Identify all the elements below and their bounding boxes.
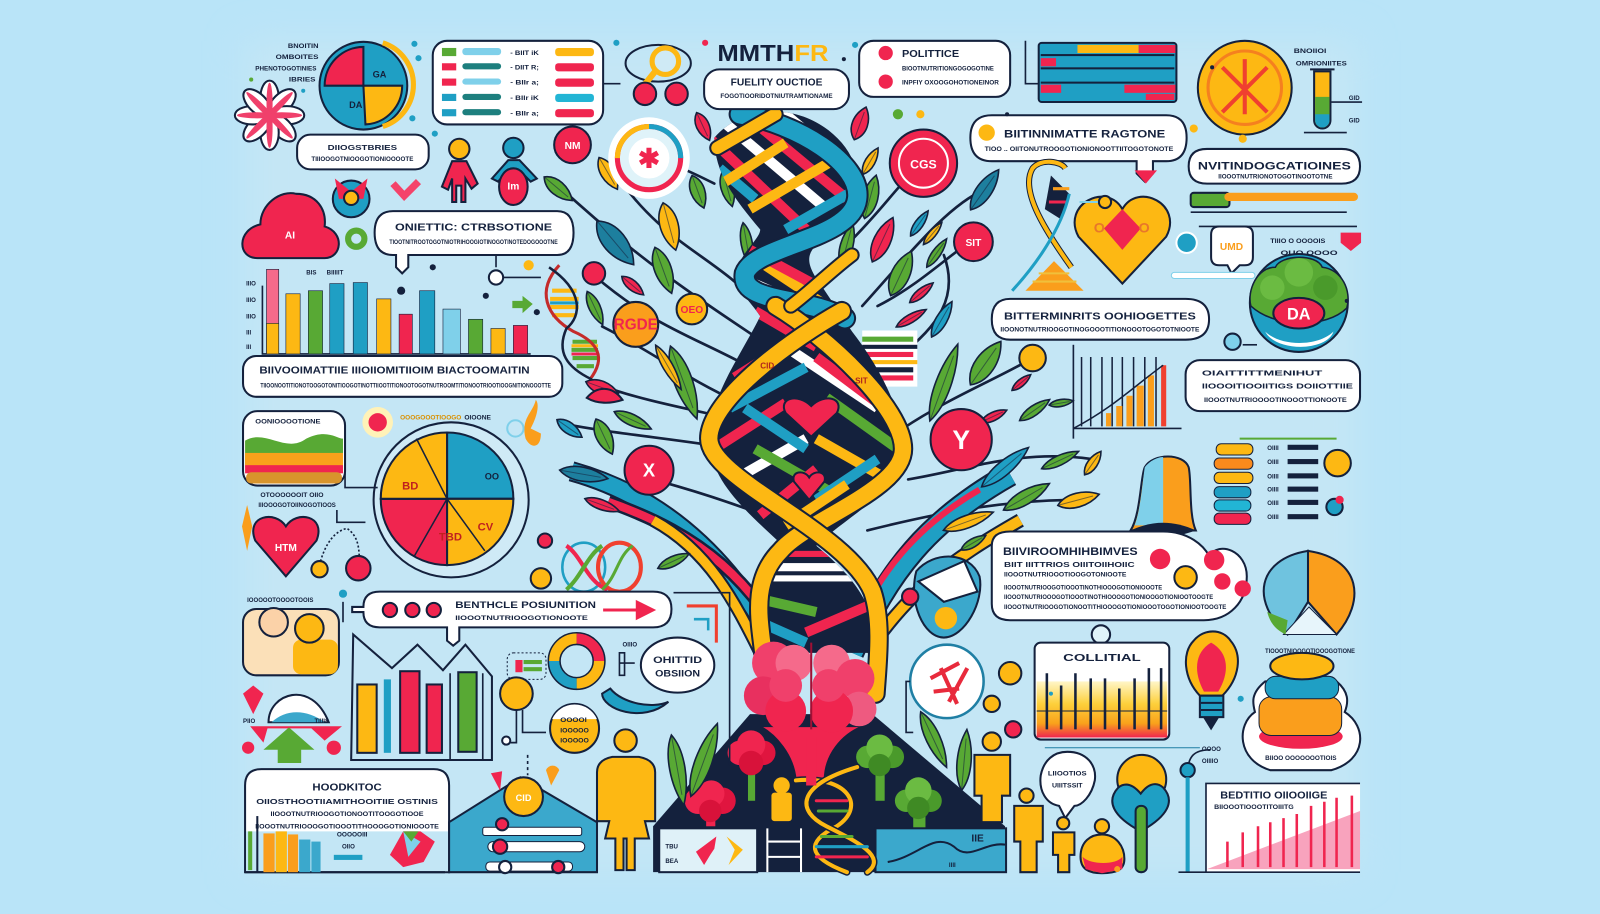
box: environment text: IIOOOTNUTRIOOOGOTIOOOTINOTHIOOOGOTIONIOOGOTIONIOOTOOGTE [1004, 594, 1213, 601]
box: nvitindog: NVITINDOGCATIOINES [1198, 160, 1351, 172]
ladder [767, 828, 801, 872]
box: environment text: BIIT IIITTRIOS OIIITOIIHOIIC [1004, 561, 1135, 569]
heart yellow [1075, 197, 1170, 284]
lollipop line [1180, 746, 1221, 872]
dark bars list: OIIII [1267, 459, 1279, 466]
small text top left: BNOITIN [288, 43, 319, 50]
circle labels: SIT [965, 238, 982, 249]
chart labels: IIIO [246, 297, 256, 304]
right-top box: biittinnimatte: BIITINNIMATTE RAGTONE [1004, 129, 1166, 141]
helix dark core [709, 112, 904, 653]
salad bowl [1250, 254, 1348, 352]
bubble chat: UIIITSSIT [1052, 783, 1083, 790]
frame lines [906, 681, 913, 732]
red bud left [587, 389, 623, 403]
box: oiaittit: OIAITTITTMENIHUT [1202, 368, 1323, 377]
helix hearts [784, 398, 839, 500]
small dna [796, 767, 874, 872]
strand labels [760, 361, 868, 386]
baseline [1045, 747, 1200, 749]
text label: OUO OOOO [1280, 250, 1338, 257]
bubble obsiion: OBSIION [655, 668, 700, 678]
stripes by helix [862, 331, 917, 387]
dark bars list: OIIII [1267, 487, 1279, 494]
small text: IIIOOOGOTOIINOGOTIOOS [258, 502, 336, 509]
blue figure [492, 138, 537, 205]
dots near ribbon [1080, 124, 1198, 208]
yellow person large [597, 729, 655, 870]
people card [243, 608, 339, 675]
text label: TIIIO O OOOOIS [1270, 238, 1325, 245]
left icons: PIIO [243, 718, 256, 725]
subtitle box: FUELITY OUCTIOE [731, 78, 823, 89]
pie top left [320, 42, 413, 130]
small text [258, 492, 336, 509]
box: diiogstbries [297, 135, 429, 169]
pie labels: CV [478, 521, 494, 533]
helix rungs [709, 106, 898, 643]
row 1 [442, 48, 594, 57]
coin bubble: IOOOOO [560, 738, 589, 745]
box: benthcle: IIOOOTNUTRIOOGOTIONOOTE [455, 615, 588, 622]
blue house [449, 766, 597, 873]
chart labels: BIIIIIT [327, 269, 344, 276]
small label: IOOOOOTOOOOTOOIS [247, 597, 313, 604]
small icon: blue bird [333, 179, 370, 217]
small text top left: PHENOTOGOTINIES [255, 65, 316, 72]
red circle nm [554, 126, 591, 163]
dark bars list [1267, 445, 1318, 521]
box: environment text [992, 531, 1251, 620]
coin bubble [550, 704, 599, 753]
box: nutrition [243, 356, 562, 397]
stripes connector [1025, 41, 1039, 84]
row 2 [442, 63, 594, 71]
trees [685, 730, 942, 829]
test tube [1294, 48, 1362, 133]
right leaves [835, 104, 1105, 553]
green leaves lower right [914, 709, 974, 791]
dashed line [339, 590, 347, 622]
heart red: HTM [275, 543, 297, 554]
red glyph circle [910, 645, 984, 718]
pie labels [402, 471, 499, 544]
box: nutrition: BIIVOOIMATTIIE IIIOIIOMITIIOIM BIACTOOMAITIN [259, 365, 530, 376]
box: nvitindog: IIOOOTNUTRIONOTOGOTINOOTOTNE [1218, 174, 1332, 181]
colour stacks [1214, 444, 1253, 524]
yellow strands [709, 114, 903, 694]
box: genetic: TIOOTNITROOTOGOTNIOTRIHOOGIOTINOGOTINOTEDOGOOOTNE [389, 239, 558, 246]
house bar chart [351, 634, 492, 760]
coin bubble: IOOOOO [560, 727, 589, 734]
test tube: BNOIIOI [1294, 48, 1327, 55]
box: politice: POLITTICE [902, 49, 959, 60]
blue figure: Im [507, 182, 519, 193]
chart bottom right [1178, 783, 1360, 872]
row 4 [442, 94, 594, 102]
box: politice: INPFIY OXOOGOHOTIONEINOR [902, 80, 1000, 87]
dark bars list: OIIII [1267, 445, 1279, 452]
pie labels: TBD [439, 532, 462, 544]
blue heart on stem [1112, 755, 1169, 872]
tree branches and leaves [540, 104, 1105, 663]
DNA double helix [709, 106, 904, 694]
small text top left: IBRIES [289, 77, 315, 84]
right-top box: biittinnimatte: TIOO .. OIITONUTROOGOTIONIONOOTTIITOGOTONOTE [985, 146, 1173, 153]
orange circle with X [1198, 41, 1292, 135]
salad bowl: DA [1287, 305, 1311, 323]
landscape card [243, 411, 345, 486]
scattered small dots [249, 40, 1349, 872]
crescent [602, 689, 668, 713]
bubble chat: LIIOOTIOS [1048, 770, 1087, 777]
ring circle [608, 117, 690, 199]
subtitle box [704, 69, 849, 109]
green gear [348, 231, 364, 247]
test tube: GID [1349, 95, 1360, 102]
pie top left: DA [349, 100, 363, 110]
box: environments [992, 299, 1209, 340]
dark bars list: OIIII [1267, 500, 1279, 507]
bottom left panel: OIIO [342, 844, 355, 851]
coin and connectors [500, 677, 546, 775]
stripes panel [1039, 43, 1176, 102]
test tube: OMRIONIITES [1296, 60, 1347, 67]
lollipop line: OOOO [1202, 746, 1221, 753]
bar chart top left [262, 269, 531, 354]
row 5 [442, 109, 594, 117]
leaf and branch circles [583, 130, 1046, 495]
bubble obsiion: OHITTID [653, 655, 703, 665]
panel right: IIE [971, 834, 984, 845]
panel right [875, 828, 1006, 872]
cloud: AI [285, 231, 295, 242]
ribbon [1012, 162, 1071, 291]
cake: BIIOO OOOOOOOTIOIS [1265, 755, 1337, 762]
chart labels [246, 269, 344, 351]
coin bubble: OOOOI [560, 717, 587, 724]
chart bottom right: BEDTITIO OIIOOIIGE [1220, 791, 1328, 802]
red circle nm: NM [565, 141, 580, 152]
row 1: - BIIT iK [510, 50, 540, 57]
teal dotted dome [1264, 551, 1354, 634]
left icons [242, 686, 342, 763]
panel right: IIII [949, 862, 956, 869]
dark bars list: OIIII [1267, 473, 1279, 480]
left leaves [540, 110, 756, 573]
row 2: - DIIT R; [510, 64, 539, 71]
cloud [242, 193, 339, 258]
connector [603, 83, 620, 85]
green arrow [512, 296, 533, 313]
chart bottom right: BIIOOOTIOOOTITOIIITG [1214, 804, 1294, 811]
small text top left [255, 43, 319, 84]
outer ring [374, 422, 529, 577]
box: genetic [375, 211, 574, 273]
shield [1341, 233, 1361, 251]
chart labels: IIIO [246, 281, 256, 288]
XO dna [562, 543, 641, 592]
frame lines [674, 593, 730, 765]
cake [1243, 653, 1360, 770]
chart labels: III [246, 344, 251, 351]
box: benthcle: BENTHCLE POSIUNITION [455, 600, 596, 610]
small blue [1326, 496, 1344, 515]
box: oiaittit: IIOOOITIOOIITIGS DOIIOTTIIE [1202, 382, 1353, 391]
panel left [659, 828, 757, 872]
pie labels: BD [402, 481, 418, 493]
box: politice: BIOOTNUTRITIONGOGOGOTINE [902, 65, 994, 72]
box: diiogstbries: DIIOGSTBRIES [328, 143, 397, 152]
bottom scene [653, 642, 1006, 872]
chart labels: IIIO [246, 313, 256, 320]
envelope globe [902, 557, 980, 638]
progress bars [1191, 193, 1358, 226]
yellow circle list [1324, 450, 1351, 476]
orange blob [1081, 819, 1124, 873]
globe [1176, 233, 1197, 253]
box: politice [859, 41, 1010, 97]
circle labels: Y [952, 425, 970, 455]
red figure [442, 139, 478, 202]
box: environment text: BIIVIROOMHIHBIMVES [1003, 546, 1138, 558]
bottom left panel: HOODKITOC [312, 783, 382, 794]
small dna left [546, 265, 599, 379]
brain stem [806, 737, 816, 785]
mid dots [531, 534, 552, 589]
box: benthcle [352, 592, 671, 646]
dots [984, 662, 1021, 738]
bottom left panel: IIOOOTNUTRIOOGOTIONOOTITOOGOTIOOE [271, 811, 424, 818]
blue strand [740, 114, 857, 318]
bottom left panel: IIOOOTNUTRIOOOGOTIOOOTITHOOOGOTIONIOOOTE [255, 823, 439, 830]
heart yellow: O [1139, 221, 1150, 237]
right-top box: biittinnimatte [970, 115, 1187, 182]
box: oiaittit [1186, 360, 1360, 411]
panel left: BEA [665, 858, 679, 865]
branches [556, 158, 1092, 663]
box: nvitindog [1189, 149, 1360, 184]
text label [1270, 238, 1338, 257]
pie labels: OO [485, 471, 499, 481]
dark bars list: OIIII [1267, 514, 1279, 521]
panel left: TBU [665, 844, 678, 851]
small text: OTOOOOOOIT OIIO [260, 492, 324, 499]
mini legend [507, 653, 546, 679]
legend table callout [433, 41, 603, 124]
box: environment text: IIOOOTNUTRIOOOTIOOGOTONIOOTE [1004, 571, 1126, 578]
test tube: GID [1349, 117, 1360, 124]
flame [507, 400, 541, 446]
bubble chat [1040, 752, 1095, 818]
lollipop line: OIIIIO [1202, 758, 1218, 765]
connector dots [397, 255, 541, 315]
dome [1131, 456, 1196, 537]
chart labels: BIS [306, 269, 316, 276]
landscape card: OONIOOOOTIONE [255, 418, 321, 425]
circle by box [1224, 334, 1257, 350]
bar under bubble [1171, 272, 1255, 278]
small text top left: OMBOITES [276, 54, 319, 61]
row 4: - BIIr iK [510, 95, 540, 102]
ring circle: ✱ [638, 143, 660, 173]
left icons: TIIIIS [314, 718, 329, 725]
chevron heart [393, 182, 418, 196]
small figure [771, 777, 792, 821]
row 3: - BIIr a; [510, 80, 539, 87]
umd bubble [1211, 226, 1253, 273]
dark scene [653, 714, 1005, 872]
triangle [1025, 261, 1084, 291]
circles and connector [311, 510, 371, 580]
donut [554, 639, 599, 683]
bottom left panel [245, 769, 449, 872]
circle labels: X [643, 459, 656, 480]
bulb [1186, 631, 1238, 730]
bubble obsiion [619, 638, 714, 693]
title: MMTH FR [717, 40, 829, 66]
box: environment text: IIOOOTNUTRIOOGOTIONOOTITHIOOOGOTIONIOOOTOGOTIONIOOTOOGTE [1004, 604, 1226, 611]
box: environments: BITTERMINRITS OOHIOGETTES [1004, 311, 1196, 322]
pie chart [374, 422, 529, 577]
collit chart [1035, 643, 1169, 740]
circle labels: OEO [681, 305, 703, 316]
chart labels: III [246, 330, 251, 337]
box: environment text: IIOOOTNUTRIOOGOTIOOOTINOTHIOOOGOTIONIOOOTE [1004, 585, 1162, 592]
yellow persons right [974, 732, 1074, 872]
row 3 [442, 79, 594, 87]
box: genetic: ONIETTIC: CTRBSOTIONE [395, 223, 552, 234]
bottom left panel: OIIOSTHOOTIIAMITHOOITIIE OSTINIS [256, 798, 438, 806]
orange bracket [687, 606, 716, 643]
sun: OIOONE [464, 414, 491, 421]
subtitle box: FOGOTIOORIDOTNIUTRAMTIONAME [720, 93, 833, 100]
ring [1092, 625, 1110, 644]
row 5: - BIIr a; [510, 110, 539, 117]
strand labels: SIT [855, 377, 868, 386]
diamond [242, 505, 252, 551]
circle labels: RGDE [614, 316, 658, 333]
heart yellow: O [1094, 221, 1105, 237]
pie slices [381, 433, 513, 565]
arrow bar [1240, 438, 1337, 440]
umd bubble: UMD [1220, 242, 1243, 253]
strand labels: CID [760, 361, 774, 370]
sun [362, 407, 491, 438]
heart red [253, 517, 319, 576]
circle labels: CGS [910, 157, 937, 171]
green leaves lower left [664, 721, 725, 807]
flower [235, 81, 304, 150]
box: diiogstbries: TIIIOOGOTNIOOGOTIONIOOOOTE [311, 156, 413, 163]
bottom left panel: OOOOOIII [337, 831, 368, 838]
blue house: CID [516, 793, 532, 803]
box: nutrition: TIIOONOOTITIONOTOOGOTONITIOOGOTINOTTIIOOTITIONOOTOGOTNUTROOMTITIONOOTRIOOTIOOGNITIONOOOTTE [260, 383, 551, 390]
box: environments: IIOONOTNUTRIOOGOTINOGOOOTITIONOOOTOGOTOTNIOOTE [1000, 327, 1199, 334]
dome caption: TIOOOTNIOOGOTIOOOGOTIONE [1265, 648, 1355, 655]
line bar chart [1073, 345, 1182, 439]
bubble obsiion: OIIIO [623, 642, 637, 649]
box: oiaittit: IIOOOTNUTRIOOOOTINOOOTTIONOOTE [1204, 397, 1347, 404]
brain [744, 642, 877, 780]
circle labels [614, 157, 982, 480]
inner area [245, 41, 1357, 872]
sun: OOOGOOOTIOOGO [400, 414, 462, 421]
connector [345, 463, 378, 488]
pie top left: GA [373, 70, 387, 80]
collit chart: COLLITIAL [1063, 653, 1141, 664]
red marker [1135, 170, 1157, 184]
magnifier icon [626, 45, 691, 105]
